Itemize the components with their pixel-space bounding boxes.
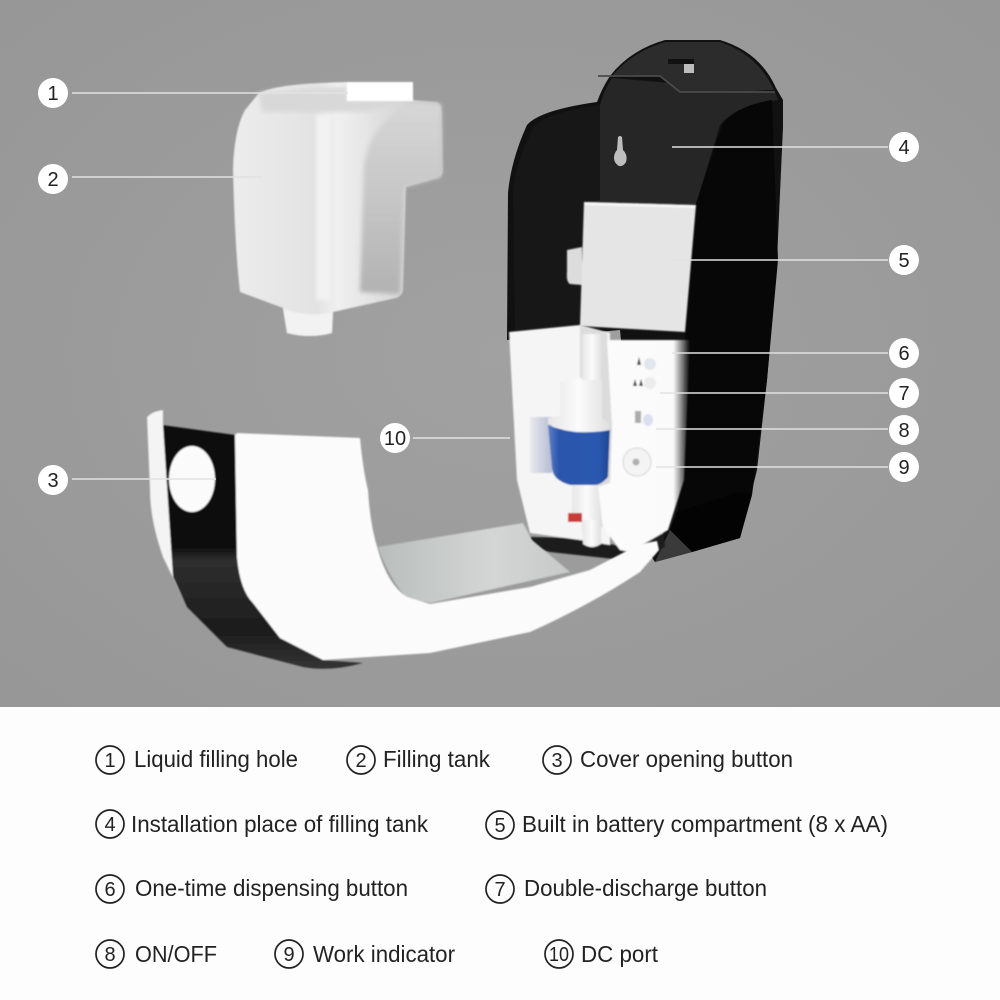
- callout 8: 8: [898, 420, 910, 442]
- legend item 10: [545, 940, 659, 968]
- callout 6: [672, 338, 919, 368]
- legend item 8: [96, 940, 217, 968]
- legend item 8: ON/OFF: [135, 941, 217, 967]
- icon: cover opening button: [169, 446, 215, 512]
- callout 5: [672, 245, 919, 275]
- icon: battery compartment: [567, 202, 696, 332]
- legend item 4: Installation place of filling tank: [131, 811, 428, 837]
- legend item 5: Built in battery compartment (8 x AA): [522, 811, 888, 837]
- callout 2: [38, 164, 262, 194]
- legend item 5: 5: [494, 815, 506, 837]
- legend item 1: Liquid filling hole: [134, 746, 298, 772]
- legend item 2: 2: [355, 750, 367, 772]
- legend item 3: Cover opening button: [580, 746, 793, 772]
- legend item 10: DC port: [581, 941, 659, 967]
- photo background panel: [0, 0, 1000, 707]
- callout 4: [672, 132, 919, 162]
- callout 4: 4: [898, 137, 910, 159]
- callout 7: 7: [898, 383, 910, 405]
- icon: DC port: [623, 448, 651, 476]
- legend item 7: Double-discharge button: [524, 875, 767, 901]
- callout 10: [380, 423, 510, 453]
- legend item 9: 9: [283, 944, 295, 966]
- legend item 6: 6: [104, 879, 116, 901]
- callout 7: [660, 378, 919, 408]
- legend item 2: Filling tank: [383, 746, 490, 772]
- callout 2: 2: [47, 169, 59, 191]
- callout 9: [656, 452, 919, 482]
- callout 8: [656, 415, 919, 445]
- callout 3: [38, 465, 216, 495]
- legend item 1: 1: [104, 750, 116, 772]
- icon: front cover: [147, 410, 659, 669]
- legend item 3: 3: [551, 750, 563, 772]
- legend item 10: 10: [549, 944, 569, 966]
- legend item 2: [347, 746, 490, 774]
- icon: filling tank: [233, 82, 443, 336]
- callout 1: 1: [47, 83, 59, 105]
- callout 10: 10: [384, 428, 406, 450]
- callout 1: [38, 78, 348, 108]
- icon: pump and control unit: [509, 325, 690, 560]
- legend item 4: 4: [104, 814, 116, 836]
- callout 3: 3: [47, 470, 59, 492]
- legend item 9: Work indicator: [313, 941, 455, 967]
- callout 9: 9: [898, 457, 910, 479]
- callout 6: 6: [898, 343, 910, 365]
- legend item 8: 8: [104, 944, 116, 966]
- legend item 6: One-time dispensing button: [135, 875, 408, 901]
- icon: dispenser back shell: [507, 40, 783, 562]
- icon: keyhole mount: [614, 136, 627, 166]
- legend panel: [0, 707, 1000, 1000]
- callout 5: 5: [898, 250, 910, 272]
- legend item 7: 7: [494, 879, 506, 901]
